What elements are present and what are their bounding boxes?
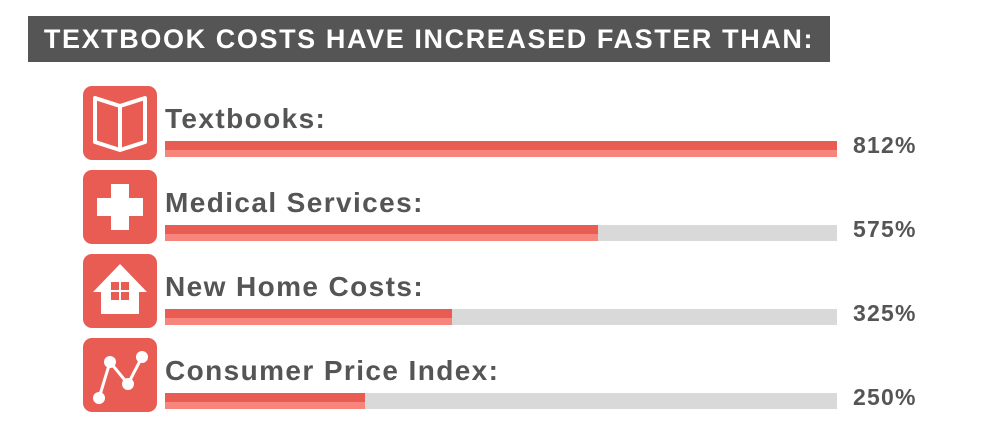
label: Medical Services: — [165, 187, 424, 218]
icon: book — [83, 86, 157, 160]
value: 250% — [853, 384, 917, 410]
row: textbooks — [83, 86, 917, 160]
title: TEXTBOOK COSTS HAVE INCREASED FASTER THAN: — [44, 24, 814, 54]
bar — [165, 393, 837, 409]
row: home — [83, 254, 917, 328]
bar — [165, 309, 837, 325]
value: 575% — [853, 216, 917, 242]
title — [28, 16, 830, 62]
icon: cross — [83, 170, 157, 244]
icon: house — [83, 254, 157, 328]
icon: line chart — [83, 338, 157, 412]
label: New Home Costs: — [165, 271, 424, 302]
value: 325% — [853, 300, 917, 326]
row: CPI — [83, 338, 917, 412]
bar — [165, 141, 837, 157]
value: 812% — [853, 132, 917, 158]
row: medical — [83, 170, 917, 244]
label: Consumer Price Index: — [165, 355, 499, 386]
label: Textbooks: — [165, 103, 326, 134]
bar — [165, 225, 837, 241]
